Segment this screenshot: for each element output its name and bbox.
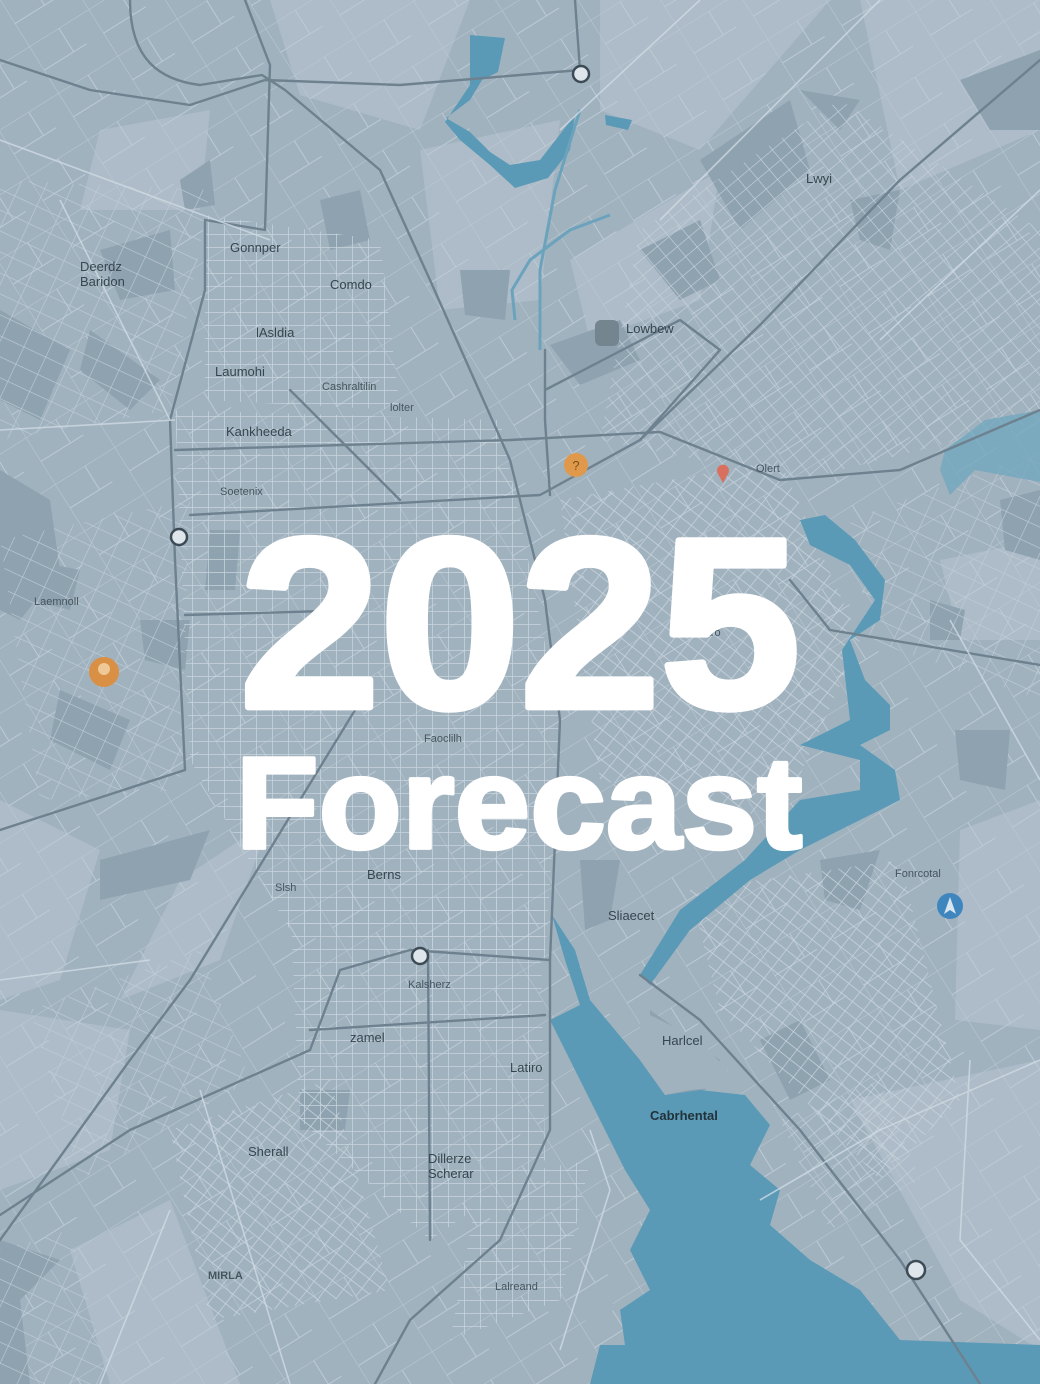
- map labels: Berns: [367, 867, 401, 882]
- icon: orange pin upper: ?: [572, 458, 580, 473]
- water: northern lake and streams: [445, 35, 632, 188]
- small road labels: Faoclilh: [424, 733, 462, 745]
- water: harbor: [550, 915, 1040, 1384]
- small road labels: Lalreand: [495, 1281, 538, 1293]
- map labels: Kankheeda: [226, 424, 293, 439]
- map labels: Deerdz: [80, 259, 122, 274]
- water: right inlet: [940, 410, 1040, 495]
- map labels: Lwyi: [806, 171, 832, 186]
- icon: square marker: [595, 320, 619, 346]
- map labels: Gonnper: [230, 240, 281, 255]
- map labels: Dillerze: [428, 1151, 471, 1166]
- map labels: [80, 171, 832, 1181]
- small road labels: Laemnoll: [34, 596, 79, 608]
- small road labels: Kalsherz: [408, 979, 451, 991]
- map labels: Scherar: [428, 1166, 474, 1181]
- map labels: zamel: [350, 1030, 385, 1045]
- map labels: Harlcel: [662, 1033, 703, 1048]
- icon: blue marker: [937, 893, 963, 919]
- map labels: Laumohi: [215, 364, 265, 379]
- map labels: lAsldia: [256, 325, 295, 340]
- small road labels: Cashraltilin: [322, 381, 376, 393]
- small road labels: Guaro: [690, 627, 721, 639]
- water: eastern river: [640, 515, 900, 985]
- map labels: Latiro: [510, 1060, 543, 1075]
- small road labels: Fonrcotal: [895, 868, 941, 880]
- map labels: Comdo: [330, 277, 372, 292]
- icon: orange pin upper: [564, 453, 588, 477]
- small road labels: [34, 381, 941, 1293]
- map labels: Cabrhental: [650, 1108, 718, 1123]
- icon: road junction circles: [171, 66, 925, 1279]
- land islands in harbor: [585, 1010, 740, 1340]
- map labels: Baridon: [80, 274, 125, 289]
- small road labels: lolter: [390, 402, 414, 414]
- small road labels: Slsh: [275, 882, 296, 894]
- title: 2025: 2025: [240, 489, 800, 759]
- map labels: Lowbew: [626, 321, 674, 336]
- map labels: Sherall: [248, 1144, 289, 1159]
- small road labels: Soetenix: [220, 486, 263, 498]
- small road labels: Olert: [756, 463, 780, 475]
- small road labels: MIRLA: [208, 1270, 243, 1282]
- icon: orange pin left: [89, 657, 119, 687]
- icon: red marker: [717, 465, 729, 483]
- map labels: Sliaecet: [608, 908, 655, 923]
- title: Forecast: Forecast: [236, 730, 802, 876]
